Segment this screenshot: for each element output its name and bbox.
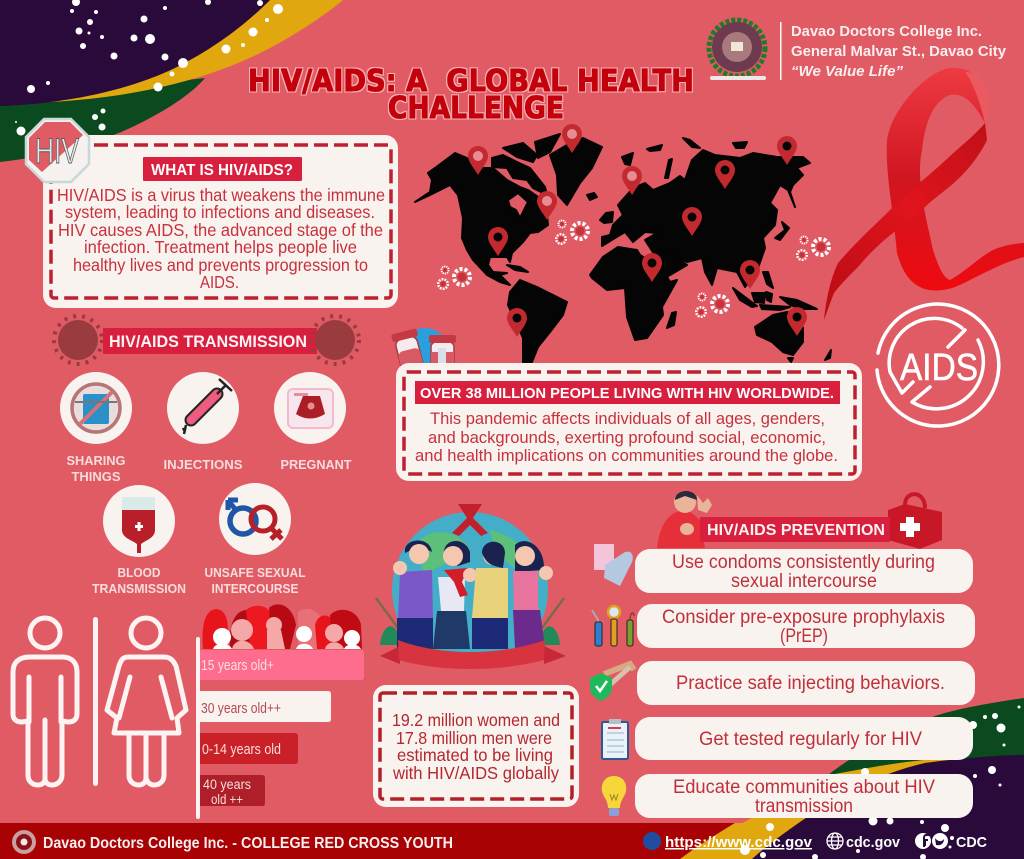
heading: prevention: HIV/AIDS PREVENTION xyxy=(707,522,885,539)
body text xyxy=(415,410,838,465)
college details: General Malvar St., Davao City xyxy=(791,44,1006,60)
red ribbon on globe xyxy=(452,504,488,536)
statistic text: with HIV/AIDS globally xyxy=(392,763,559,783)
person 1 xyxy=(393,540,433,649)
college details: “We Value Life” xyxy=(791,64,904,80)
transmission: blood: BLOOD xyxy=(118,565,160,580)
statistic text xyxy=(392,710,560,783)
Svalbard and arctic Russia islands xyxy=(622,138,747,178)
Iceland xyxy=(587,193,597,200)
transmission: sharing things: SHARING xyxy=(66,453,126,468)
transmission: blood xyxy=(92,485,186,596)
icon: condom packets xyxy=(594,544,633,586)
prevention item: educate xyxy=(602,774,973,818)
title: CHALLENGE xyxy=(388,91,564,126)
description text: system, leading to infections and diseases. xyxy=(65,202,375,222)
heading: OVER 38 MILLION PEOPLE LIVING WITH HIV WORLDWIDE. xyxy=(420,385,834,402)
world map xyxy=(415,134,831,362)
statistic text: 17.8 million men were xyxy=(396,728,552,748)
body text: and health implications on communities around the globe. xyxy=(415,447,838,465)
description text: infection. Treatment helps people live xyxy=(84,237,357,257)
prevention item: PrEP xyxy=(592,604,975,648)
transmission: sharing things: THINGS xyxy=(72,469,121,484)
transmission: unsafe sexual intercourse: INTERCOURSE xyxy=(212,581,299,596)
Tasmania and New Zealand xyxy=(788,350,831,362)
bar: 30 years old++: 30 years old++ xyxy=(201,701,281,717)
Indonesia xyxy=(733,288,790,310)
description text xyxy=(57,185,385,292)
AIDS no-entry icon: AIDS xyxy=(900,347,978,389)
body text: and backgrounds, exerting profound social, economic, xyxy=(428,429,826,447)
body text: This pandemic affects individuals of all ages, genders, xyxy=(430,410,825,428)
bar: 0-14 years old xyxy=(198,733,298,764)
person 3 xyxy=(472,542,508,649)
illustration: people and globe xyxy=(376,504,566,669)
banner xyxy=(380,640,566,669)
Philippines xyxy=(763,272,773,288)
heading: what is HIV/AIDS: WHAT IS HIV/AIDS? xyxy=(151,162,293,179)
icon: HIV stop sign: HIV xyxy=(35,132,79,171)
North America xyxy=(415,153,548,285)
heading: prevention xyxy=(657,491,942,549)
transmission: pregnant xyxy=(274,372,352,472)
transmission: injections xyxy=(164,372,243,472)
icon: clipboard xyxy=(602,719,628,759)
icon: tools xyxy=(592,606,634,646)
person 4 xyxy=(513,541,553,648)
college details xyxy=(780,22,1006,80)
icon: person xyxy=(657,491,712,548)
AIDS no-entry icon xyxy=(877,304,999,426)
transmission: pregnant: PREGNANT xyxy=(280,457,352,472)
transmission: unsafe sexual intercourse xyxy=(204,483,306,596)
footer cdc links xyxy=(643,832,987,851)
prevention item: injecting: Practice safe injecting behaviors. xyxy=(676,673,945,694)
map virus clusters xyxy=(438,220,829,317)
footer cdc links: cdc.gov xyxy=(846,834,901,851)
prevention item: condoms: sexual intercourse xyxy=(731,571,877,592)
panel: gender statistic xyxy=(373,685,579,807)
footer cdc links: CDC xyxy=(956,834,987,851)
transmission: sharing things xyxy=(60,372,132,484)
Australia xyxy=(755,312,803,355)
icon: virus left xyxy=(54,316,102,364)
statistic text: 19.2 million women and xyxy=(392,710,560,730)
person 2 xyxy=(433,541,477,649)
statistic text: estimated to be living xyxy=(397,745,553,765)
footer college text: Davao Doctors College Inc. - COLLEGE RED CROSS YOUTH xyxy=(43,835,453,852)
leaves xyxy=(376,598,564,628)
map pins xyxy=(468,124,807,337)
heading: transmission xyxy=(54,316,359,364)
college details: Davao Doctors College Inc. xyxy=(791,24,982,40)
bar: 40 years old ++ xyxy=(198,775,265,807)
transmission: unsafe sexual intercourse: UNSAFE SEXUAL xyxy=(204,565,306,580)
prevention item: get tested xyxy=(602,717,973,760)
Madagascar xyxy=(667,312,676,328)
bar: 40 years old ++: 40 years xyxy=(203,777,251,792)
college logo xyxy=(709,20,766,80)
prevention item: PrEP: (PrEP) xyxy=(780,626,828,647)
prevention item: condoms: Use condoms consistently during xyxy=(672,552,935,573)
panel: what is HIV/AIDS xyxy=(43,135,398,308)
icon: shield and syringe xyxy=(590,664,634,701)
Africa xyxy=(590,247,677,340)
axis line xyxy=(196,637,200,819)
red ribbon xyxy=(824,68,1024,320)
icon: test tubes xyxy=(391,328,456,376)
bar: 15 years old+: 15 years old+ xyxy=(201,658,274,674)
Eurasia xyxy=(602,150,810,287)
prevention item: condoms xyxy=(594,544,973,593)
footer logo xyxy=(12,830,36,854)
prevention item: educate: transmission xyxy=(755,796,853,817)
panel: 38 million xyxy=(396,363,862,481)
icon: light bulb xyxy=(602,776,626,816)
chart: age group bars xyxy=(196,604,364,819)
heading: transmission: HIV/AIDS TRANSMISSION xyxy=(109,333,307,351)
description text: healthy lives and prevents progression to xyxy=(73,255,368,275)
South America xyxy=(508,280,567,362)
description text: AIDS. xyxy=(200,272,239,292)
bar: 30 years old++ xyxy=(198,691,331,722)
icon: virus right xyxy=(311,316,359,364)
title: HIV/AIDS: A GLOBAL HEALTH xyxy=(248,64,694,99)
bar: 0-14 years old: 0-14 years old xyxy=(202,742,281,758)
icon: first aid kit xyxy=(888,494,942,549)
decorative swoosh: top left xyxy=(0,0,343,162)
icon: HIV stop sign xyxy=(25,118,90,183)
prevention item: educate: Educate communities about HIV xyxy=(673,777,935,798)
icon: man figure xyxy=(13,618,77,785)
footer bar xyxy=(0,706,1024,859)
title xyxy=(248,64,694,126)
Greenland xyxy=(550,138,602,205)
divider xyxy=(93,617,98,786)
prevention item: injecting xyxy=(590,661,975,705)
bar: 40 years old ++: old ++ xyxy=(211,792,243,807)
icon: woman figure xyxy=(107,618,186,785)
crowd silhouettes xyxy=(203,604,362,649)
New Guinea xyxy=(780,297,817,309)
description text: HIV/AIDS is a virus that weakens the immune xyxy=(57,185,385,205)
description text: HIV causes AIDS, the advanced stage of the xyxy=(58,220,383,240)
Cuba xyxy=(507,265,528,272)
bar: 15 years old+ xyxy=(198,650,364,680)
transmission: blood: TRANSMISSION xyxy=(92,581,186,596)
UK xyxy=(600,212,613,223)
Arctic islands xyxy=(492,134,560,195)
Japan xyxy=(775,222,789,240)
prevention item: get tested: Get tested regularly for HIV xyxy=(699,729,922,750)
heading: what is HIV/AIDS xyxy=(143,157,302,181)
globe xyxy=(392,512,548,668)
footer cdc links: https://www.cdc.gov xyxy=(665,834,813,851)
transmission: injections: INJECTIONS xyxy=(164,457,243,472)
decorative swoosh: bottom right xyxy=(680,698,1024,859)
prevention item: PrEP: Consider pre-exposure prophylaxis xyxy=(662,607,945,628)
